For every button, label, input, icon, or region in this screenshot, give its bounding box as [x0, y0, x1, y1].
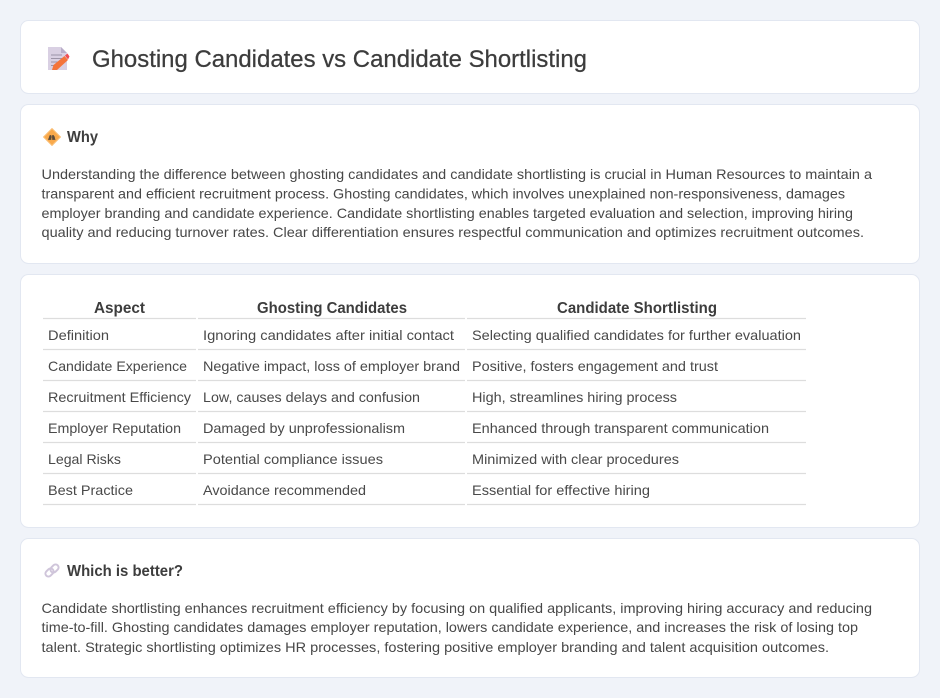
row: best practice: Essential for effective hiring	[472, 482, 650, 498]
row: definition	[48, 327, 801, 343]
row: legal risks: Legal Risks	[48, 451, 121, 467]
row: legal risks	[48, 451, 679, 467]
row: recruitment efficiency: Recruitment Efficiency	[48, 389, 191, 405]
row: recruitment efficiency	[48, 389, 677, 405]
row: candidate experience: Negative impact, loss of employer brand	[203, 358, 460, 374]
text block: why	[42, 166, 872, 240]
row: best practice: Best Practice	[48, 482, 133, 498]
icon: document with pencil	[48, 47, 70, 70]
row: definition: Selecting qualified candidates for further evaluation	[472, 327, 801, 343]
row: candidate experience: Candidate Experience	[48, 358, 187, 374]
row: recruitment efficiency: Low, causes delays and confusion	[203, 389, 420, 405]
title: Ghosting Candidates vs Candidate Shortlisting	[92, 46, 587, 73]
table header: Aspect	[94, 300, 145, 317]
row: employer reputation: Employer Reputation	[48, 420, 181, 436]
text block: which is better: time-to-fill. Ghosting candidates damages employer reputation, lowers candidate experience, and increases the risk of losing top	[42, 619, 858, 635]
text block: why: quality and reducing turnover rates. Clear differentiation ensures respectful communication and optimizes recruitment outcomes.	[42, 224, 864, 240]
table header: Candidate Shortlisting	[557, 300, 717, 317]
row: employer reputation: Enhanced through transparent communication	[472, 420, 769, 436]
heading: which is better: Which is better?	[67, 563, 183, 580]
panel: why	[20, 104, 920, 264]
panel: comparison table	[20, 274, 920, 528]
panel: header	[20, 20, 920, 94]
row: employer reputation: Damaged by unprofessionalism	[203, 420, 405, 436]
text block: which is better	[42, 600, 872, 655]
row: recruitment efficiency: High, streamlines hiring process	[472, 389, 677, 405]
text block: why: employer branding and candidate experience. Candidate shortlisting enables targeted evaluation and selection, improving hiring	[42, 205, 853, 221]
row: best practice	[48, 482, 650, 498]
text block: why: Understanding the difference between ghosting candidates and candidate shortlisting is crucial in Human Resources to maintain a	[42, 166, 872, 182]
row: legal risks: Minimized with clear procedures	[472, 451, 679, 467]
row: best practice: Avoidance recommended	[203, 482, 366, 498]
row: employer reputation	[48, 420, 769, 436]
row: definition: Ignoring candidates after initial contact	[203, 327, 454, 343]
panel: which is better	[20, 538, 920, 678]
row: candidate experience: Positive, fosters engagement and trust	[472, 358, 718, 374]
row: legal risks: Potential compliance issues	[203, 451, 383, 467]
row: candidate experience	[48, 358, 718, 374]
heading: why: Why	[67, 129, 98, 146]
text block: why: transparent and efficient recruitment process. Ghosting candidates, which involves unexplained non-responsiveness, damages	[42, 186, 845, 202]
table header: Ghosting Candidates	[257, 300, 407, 317]
icon: warning diamond	[44, 128, 60, 146]
table header	[94, 300, 717, 317]
row: definition: Definition	[48, 327, 109, 343]
icon: link	[44, 563, 60, 578]
text block: which is better: Candidate shortlisting enhances recruitment efficiency by focusing on qualified applicants, improving hiring accuracy and reducing	[42, 600, 872, 616]
text block: which is better: talent. Strategic shortlisting optimizes HR processes, fostering positive employer branding and talent acquisition outcomes.	[42, 639, 829, 655]
